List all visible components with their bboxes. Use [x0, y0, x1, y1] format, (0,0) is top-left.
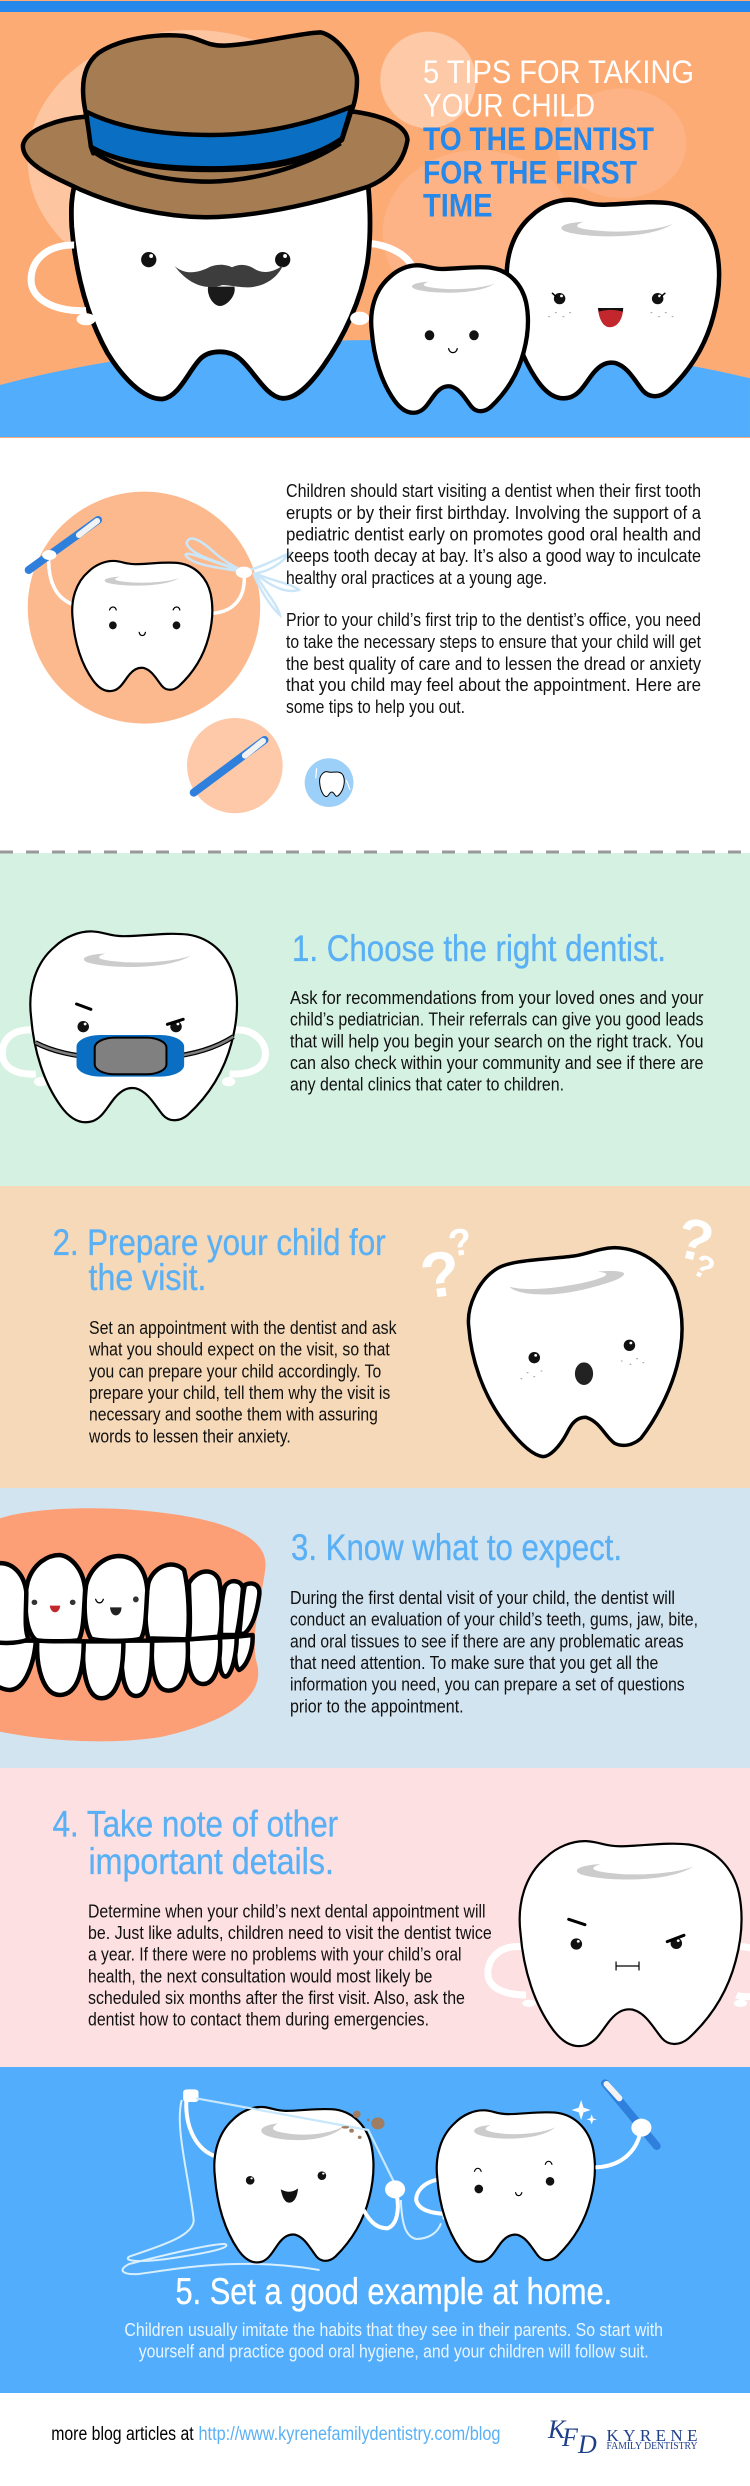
tooth wearing mask: [2, 931, 265, 1122]
body text: and oral tissues to see if there are any problematic areas: [290, 1630, 684, 1651]
body text: words to lessen their anxiety.: [88, 1425, 291, 1446]
body text: be. Just like adults, children need to visit the dentist twice: [88, 1922, 492, 1943]
tooth with brush and floss: [72, 561, 212, 691]
panel: header: [0, 0, 750, 438]
intro text: Children should start visiting a dentist when their first tooth: [286, 480, 701, 501]
heading: 1. Choose the right dentist.: [292, 928, 666, 969]
title: YOUR CHILD: [423, 88, 595, 124]
heading: [53, 1222, 386, 1298]
panel: tip 3: [0, 1488, 750, 1768]
blog link: http://www.kyrenefamilydentistry.com/blog: [198, 2424, 500, 2445]
body text: what you should expect on the visit, so that: [88, 1339, 390, 1360]
logo: Kyrene Family Dentistry: F: [561, 2423, 579, 2452]
two teeth brushing and flossing: [122, 2083, 657, 2274]
body text: information you need, you can prepare a set of questions: [290, 1674, 685, 1695]
blog link: more blog articles at: [51, 2424, 194, 2445]
heading: [53, 1804, 338, 1882]
body text: any dental clinics that cater to children.: [290, 1074, 564, 1095]
annoyed tooth: [488, 1841, 750, 2046]
body text: [290, 987, 704, 1095]
intro text: erupts or by their first birthday. Involving the support of a: [286, 502, 702, 523]
heading: 2. Prepare your child for: [53, 1222, 386, 1263]
top blue strip: [0, 1, 750, 12]
body text: necessary and soothe them with assuring: [89, 1404, 378, 1425]
body text: Determine when your child’s next dental appointment will: [88, 1900, 486, 1921]
floss: [122, 2100, 320, 2274]
faces on teeth: [32, 1596, 139, 1615]
panel: introduction: [28, 480, 702, 813]
title: [423, 54, 694, 224]
logo: Kyrene Family Dentistry: K: [547, 2415, 567, 2444]
tooth: child: [371, 265, 528, 413]
right tooth: [416, 2083, 657, 2262]
intro illustration: [28, 492, 353, 813]
body text: [88, 1317, 397, 1446]
title: TIME: [423, 188, 492, 224]
left tooth: [183, 2089, 405, 2262]
body text: prepare your child, tell them why the visit is: [89, 1382, 390, 1403]
question marks: ?: [687, 1246, 721, 1287]
body text: Children usually imitate the habits that they see in their parents. So start with: [124, 2319, 663, 2340]
intro text: some tips to help you out.: [286, 696, 465, 717]
title: TO THE DENTIST: [423, 121, 654, 157]
heading: 5. Set a good example at home.: [176, 2271, 612, 2312]
intro text: the best quality of care and to lessen the dread or anxiety: [286, 653, 702, 674]
arms: [49, 557, 244, 613]
tooth: father with hat and moustache: [23, 32, 412, 399]
heading: 3. Know what to expect.: [291, 1527, 622, 1568]
body text: yourself and practice good oral hygiene, and your children will follow suit.: [139, 2341, 649, 2362]
body text: During the first dental visit of your child, the dentist will: [290, 1587, 675, 1608]
small circle with toothbrush: [187, 718, 283, 813]
moustache: [208, 287, 235, 306]
logo: Kyrene Family Dentistry: KYRENE: [606, 2426, 698, 2445]
intro text: healthy oral practices at a young age.: [286, 567, 547, 588]
floss loops: [186, 539, 299, 615]
open mouth with teeth: [0, 1508, 266, 1741]
panel: tip 4: [0, 1768, 750, 2067]
tooth: mother: [507, 200, 719, 398]
body text: Ask for recommendations from your loved ones and your: [290, 987, 704, 1008]
panel: tip 5: [0, 2067, 750, 2393]
body text: [88, 1900, 492, 2030]
intro text: that you child may feel about the appointment. Here are: [286, 674, 701, 695]
intro text: pediatric dentist early on promotes good oral health and: [286, 524, 701, 544]
heading: 4. Take note of other: [53, 1804, 338, 1845]
logo: Kyrene Family Dentistry: FAMILY DENTISTRY: [606, 2441, 698, 2452]
heading: the visit.: [88, 1257, 206, 1298]
body text: a year. If there were no problems with your child’s oral: [88, 1944, 462, 1965]
logo: Kyrene Family Dentistry: D: [577, 2430, 597, 2459]
body text: that will help you begin your search on the right track. You: [290, 1030, 704, 1051]
toothbrush: [29, 520, 252, 578]
tilted tooth with questioning face: [468, 1248, 682, 1457]
intro text: keeps tooth decay at bay. It’s also a good way to inculcate: [286, 545, 701, 566]
plaque: [342, 2111, 385, 2139]
title: FOR THE FIRST: [423, 154, 637, 190]
small circle with mini tooth: [305, 758, 353, 807]
body text: [290, 1587, 698, 1716]
footer: [51, 2415, 697, 2459]
body text: dentist how to contact them during emergencies.: [88, 2009, 429, 2030]
question marks: ?: [416, 1236, 465, 1313]
header illustration: family of teeth: [0, 30, 750, 437]
hat: [23, 32, 408, 217]
title: 5 TIPS FOR TAKING: [423, 54, 694, 90]
body text: health, the next consultation would most likely be: [88, 1965, 432, 1986]
question marks: ?: [445, 1220, 475, 1266]
body text: prior to the appointment.: [290, 1695, 464, 1716]
intro text: [286, 480, 702, 717]
panel: tip 2: [0, 1186, 750, 1488]
question marks: [416, 1205, 721, 1313]
sparkles: [572, 2100, 597, 2124]
heading: important details.: [88, 1841, 334, 1882]
body text: you can prepare your child accordingly. To: [89, 1360, 381, 1381]
question marks: ?: [670, 1205, 720, 1276]
body text: [124, 2319, 663, 2362]
blog link: [51, 2424, 500, 2445]
panel: tip 1: [0, 852, 750, 1186]
logo: Kyrene Family Dentistry: [547, 2415, 698, 2459]
body text: that need attention. To make sure that you get all the: [290, 1652, 658, 1673]
body text: Set an appointment with the dentist and ask: [89, 1317, 397, 1338]
body text: scheduled six months after the first visit. Also, ask the: [88, 1987, 465, 2008]
